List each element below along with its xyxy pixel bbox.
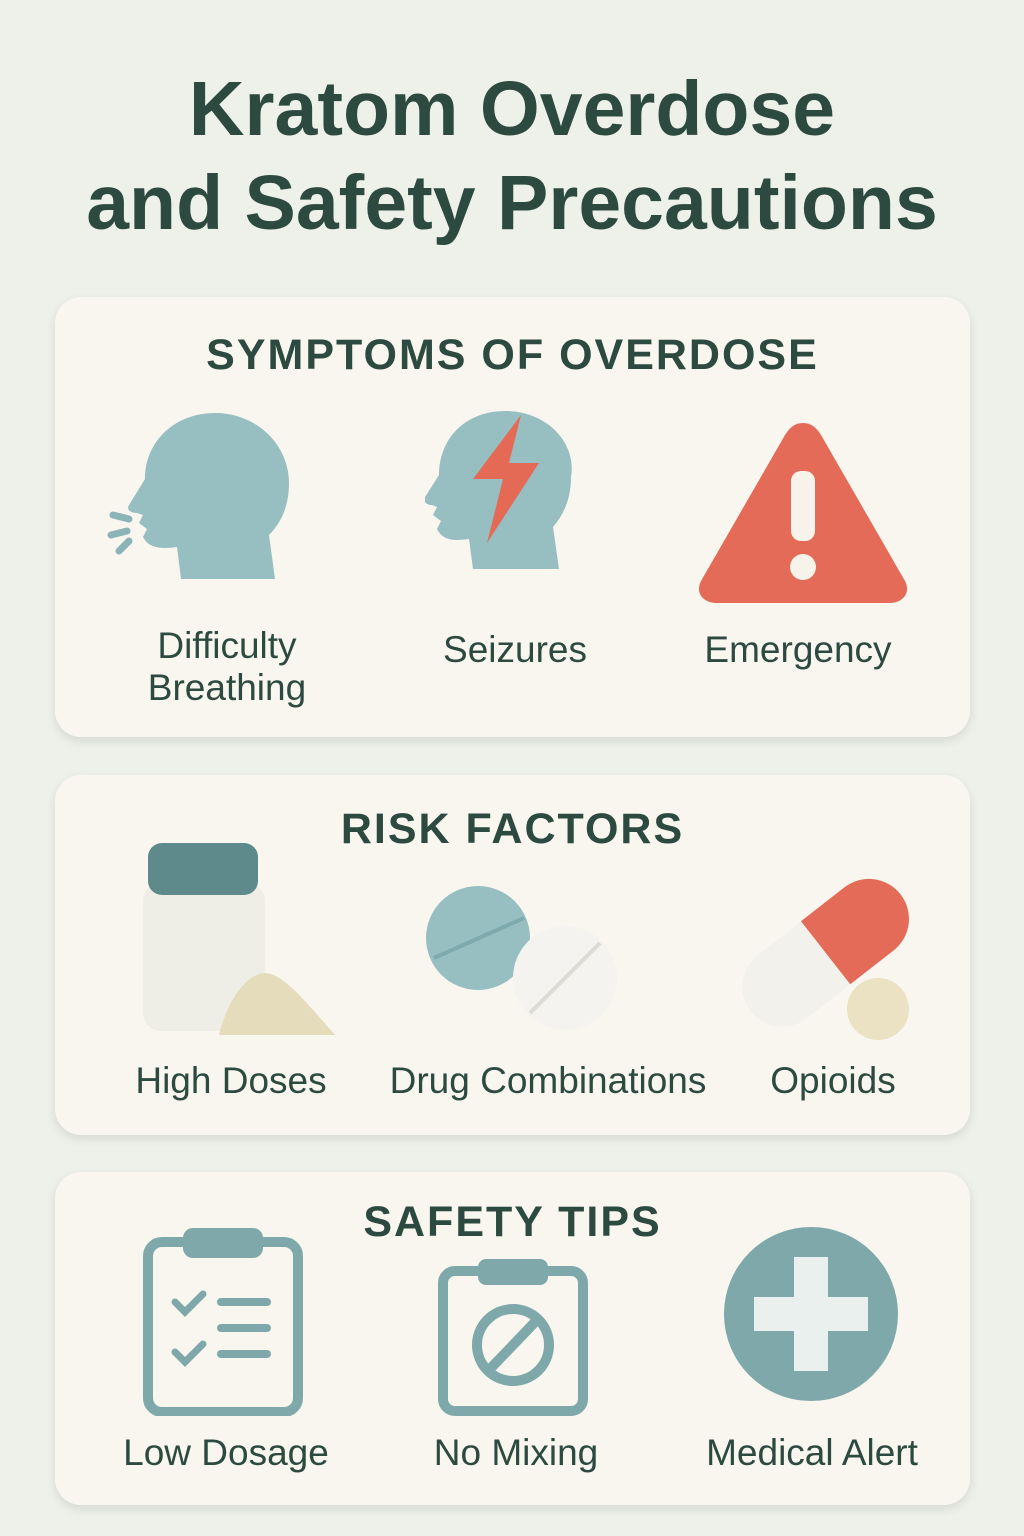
title [86, 66, 938, 246]
icon: breathing head [108, 413, 289, 579]
label: medical alert: Medical Alert [706, 1432, 918, 1473]
label: difficulty breathing: Breathing [148, 667, 306, 708]
label: high doses: High Doses [135, 1060, 327, 1101]
heading: risk factors: RISK FACTORS [341, 805, 684, 853]
icon: bottle and powder [143, 843, 335, 1035]
label: difficulty breathing [148, 625, 306, 708]
label: opioids: Opioids [770, 1060, 896, 1101]
heading: safety tips: SAFETY TIPS [363, 1198, 662, 1246]
label: difficulty breathing: Difficulty [157, 625, 297, 666]
panel: safety tips [55, 1172, 970, 1505]
title: and Safety Precautions [86, 160, 938, 246]
panel: risk factors [55, 775, 970, 1135]
title: Kratom Overdose [189, 66, 835, 152]
icon: pills [426, 886, 602, 1014]
label: no mixing: No Mixing [434, 1432, 598, 1473]
panel: symptoms [55, 297, 970, 737]
icon: clipboard checklist [143, 1228, 303, 1416]
icon: medical cross [724, 1227, 898, 1401]
label: drug combinations: Drug Combinations [390, 1060, 706, 1101]
icon: capsule [801, 878, 909, 1040]
label: emergency: Emergency [704, 629, 892, 670]
icon: warning triangle [699, 423, 907, 603]
heading: symptoms: SYMPTOMS OF OVERDOSE [206, 331, 819, 379]
label: seizures: Seizures [443, 629, 587, 670]
icon: no mixing [438, 1259, 588, 1416]
label: low dosage: Low Dosage [123, 1432, 329, 1473]
icon: seizure head [425, 411, 572, 569]
